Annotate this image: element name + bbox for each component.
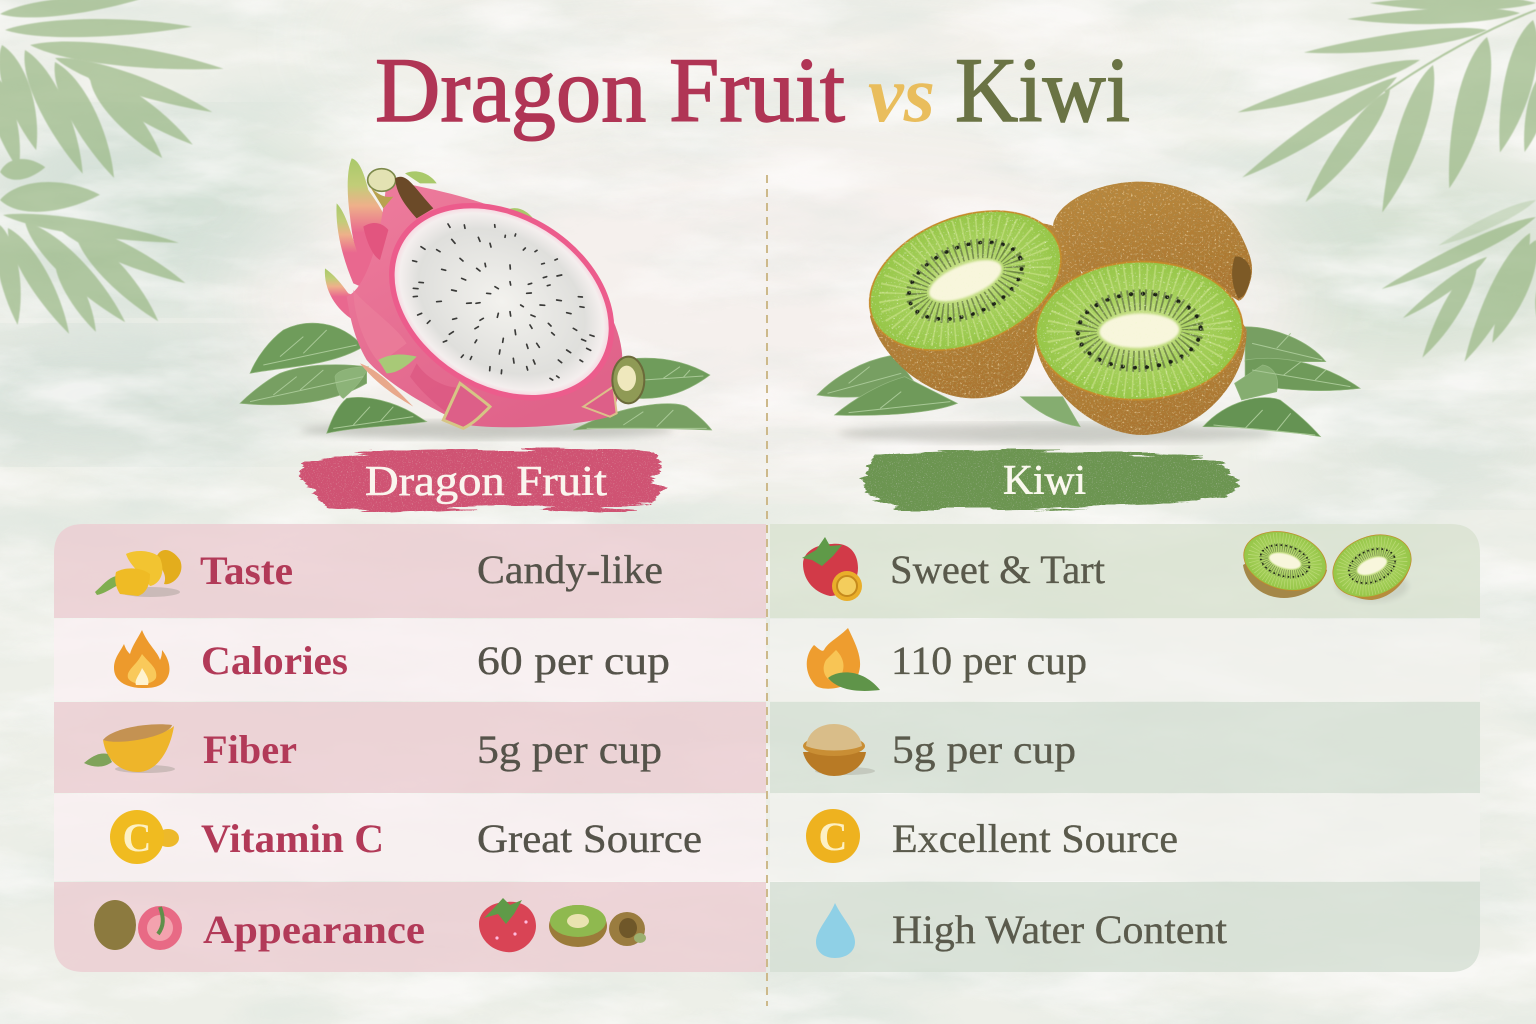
label: taste: Taste: [200, 548, 293, 593]
kiwi illustration: [849, 182, 1252, 435]
dragon fruit stem ends: [612, 357, 644, 403]
mint leaves under dragon fruit: [240, 323, 712, 433]
value: 5g per cup: 5g per cup: [477, 727, 662, 772]
kiwi left half: [849, 185, 1082, 398]
value: sweet and tart: Sweet & Tart: [890, 547, 1105, 592]
icon: water drop: [816, 903, 855, 958]
label: calories: Calories: [201, 638, 348, 683]
row: taste: [802, 523, 1421, 608]
icon: kiwi half: [549, 905, 607, 947]
value: candy-like: Candy-like: [477, 547, 663, 592]
panel: kiwi comparison rows: [770, 523, 1480, 972]
icon: strawberry: [479, 898, 536, 952]
kiwi right half: [1034, 258, 1247, 435]
pink rim: [352, 163, 651, 441]
label: fiber: Fiber: [203, 727, 297, 772]
mint leaves under kiwi: [817, 327, 1360, 443]
row: calories: [114, 630, 670, 688]
banner label: kiwi: Kiwi: [1003, 458, 1086, 504]
title: Kiwi: [955, 39, 1130, 141]
palm fronds top right: [1235, 0, 1536, 367]
title: [375, 39, 1130, 141]
panel: dragon fruit comparison rows: [54, 524, 766, 972]
row: fiber: [84, 724, 662, 773]
icon: brown bowl: [803, 724, 875, 776]
kiwi brush banner: [862, 450, 1240, 510]
row: water: [816, 903, 1227, 958]
icon: yellow bowl of fiber: [84, 724, 175, 773]
title: Dragon Fruit: [375, 39, 845, 141]
white flesh: [360, 170, 643, 433]
whole kiwi: [1053, 182, 1252, 301]
label: appearance: Appearance: [203, 907, 425, 952]
label: vitamin c: Vitamin C: [201, 816, 384, 861]
palm fronds top left: [0, 0, 225, 339]
icon: two kiwi halves: [1237, 523, 1421, 608]
dragon fruit illustration: [240, 158, 712, 441]
icon: kiwi and dragon fruit: [94, 900, 182, 950]
row: calories: [807, 628, 1087, 691]
seeds: [413, 224, 594, 380]
icon: brown kiwi half: [609, 912, 646, 946]
dragon fruit scales back: [348, 158, 387, 293]
value: excellent source: Excellent Source: [892, 816, 1178, 861]
value: 5g per cup: 5g per cup: [892, 727, 1076, 772]
row: fiber: [803, 724, 1076, 776]
value: great source: Great Source: [477, 816, 702, 861]
value: 110 per cup: 110 per cup: [891, 638, 1087, 683]
icon: yellow candy chunks: [95, 550, 181, 597]
row: appearance: [94, 898, 646, 952]
row: taste: [95, 547, 663, 597]
dragon fruit bottom scales: [378, 354, 417, 373]
banner label: dragon fruit: Dragon Fruit: [365, 459, 607, 505]
dragon fruit skin: [347, 180, 622, 427]
icon: vitamin c coin: [806, 809, 860, 863]
icon: flame with leaf: [807, 628, 880, 691]
icon: vitamin c coin: C: [123, 815, 151, 860]
icon: flame: [114, 630, 169, 688]
value: 60 per cup: 60 per cup: [477, 638, 670, 683]
icon: vitamin c coin: [110, 810, 179, 864]
value: high water content: High Water Content: [892, 907, 1227, 952]
icon: strawberry and citrus: [802, 537, 862, 601]
row: vitamin c: [110, 810, 702, 864]
title: vs: [868, 51, 935, 139]
center dashed divider: [766, 175, 768, 1006]
row: vitamin c: [806, 809, 1178, 863]
icon: vitamin c coin: C: [819, 814, 847, 859]
dragon fruit brush banner: [298, 448, 665, 512]
